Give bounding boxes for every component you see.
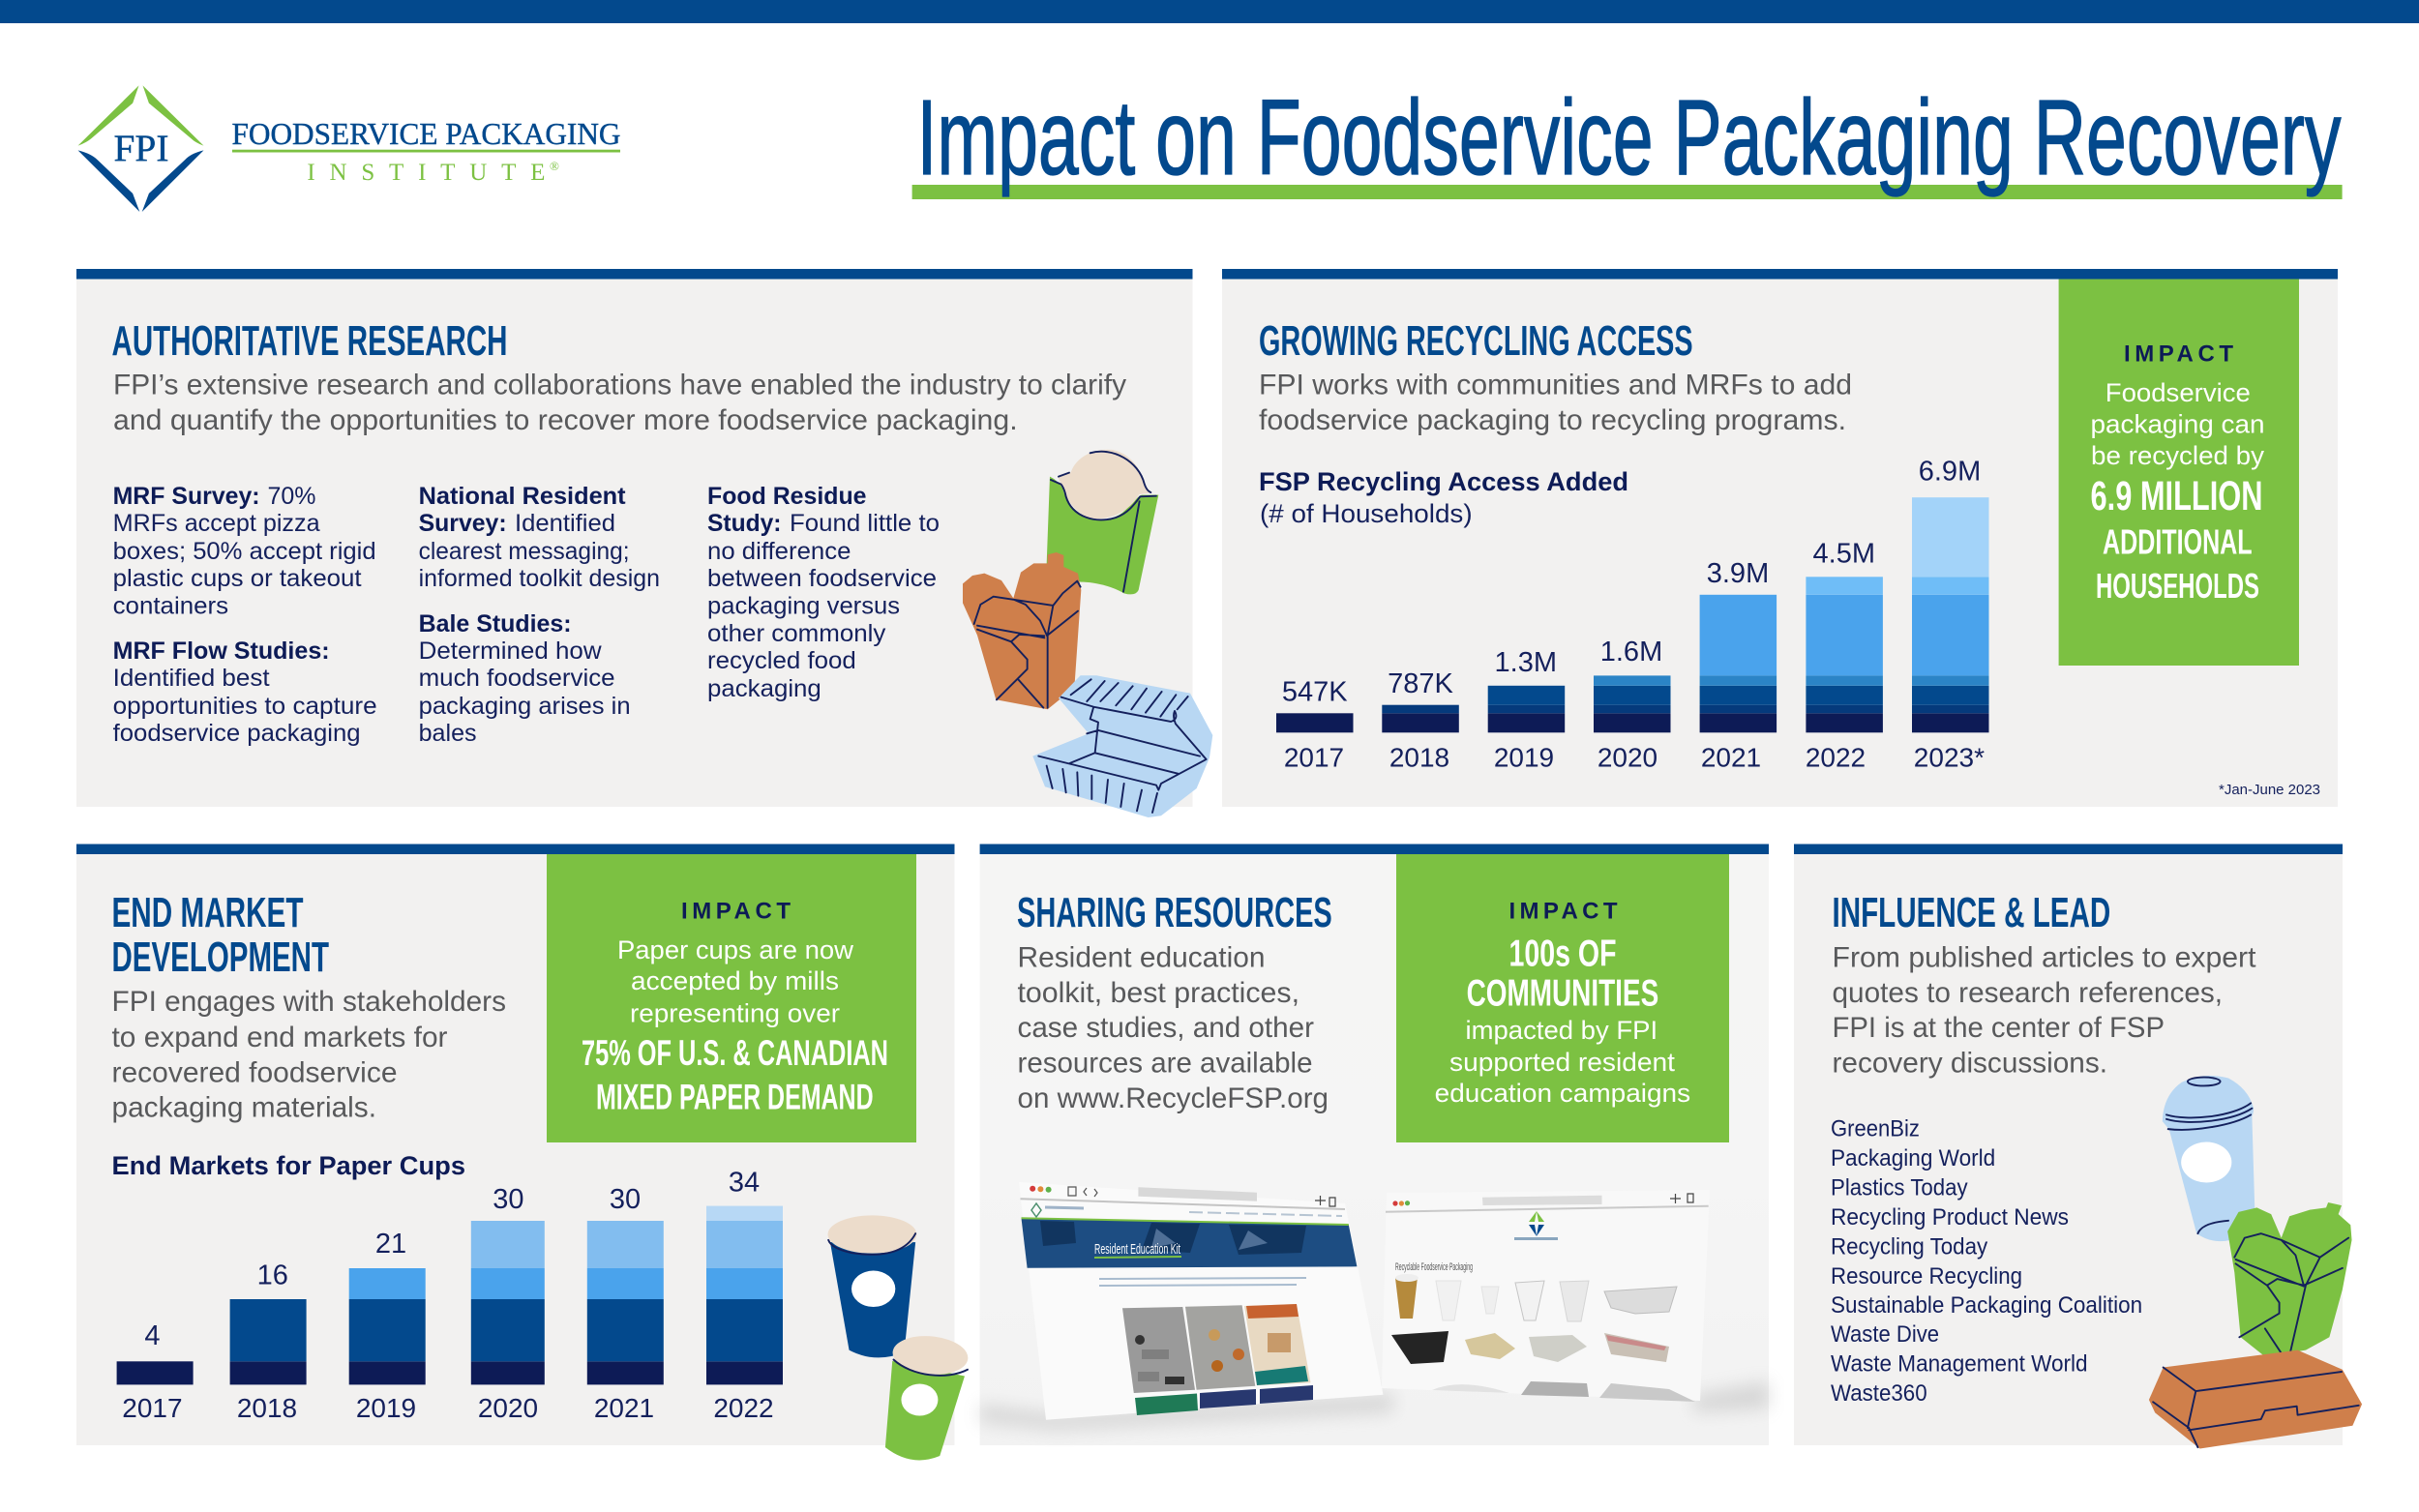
publication list: [1831, 1116, 2142, 1407]
column 1: foodservice packaging: [113, 720, 361, 747]
column 1: boxes; 50% accept rigid: [113, 538, 376, 565]
website mockup: recyclable foodservice packaging: Recyclable Foodservice Packaging: [1395, 1261, 1473, 1273]
chart title: End Markets for Paper Cups: [112, 1151, 465, 1180]
callout: impact communities: IMPACT: [1509, 898, 1618, 924]
callout: impact paper cups: Paper cups are now: [617, 935, 854, 964]
callout: impact households: ADDITIONAL: [2103, 522, 2253, 562]
column 1: opportunities to capture: [113, 693, 377, 720]
icon: packaging illustrations: [963, 450, 1212, 817]
bar chart: recycling access: 2021: [1701, 742, 1761, 772]
column 2: Identified: [515, 510, 615, 537]
callout: impact households: [2059, 279, 2299, 666]
bar chart: recycling access: 1.6M: [1600, 637, 1662, 667]
bar chart: recycling access: 6.9M: [1919, 456, 1981, 487]
bar chart: recycling access: 1.3M: [1495, 647, 1557, 678]
bar chart: end markets: 2017: [122, 1393, 183, 1423]
bar chart: recycling access: 2017: [1284, 742, 1344, 772]
icon: green cup: [885, 1332, 972, 1460]
heading: SHARING RESOURCES: [1017, 889, 1332, 936]
heading: AUTHORITATIVE RESEARCH: [112, 317, 507, 365]
bar chart: recycling access: [1276, 456, 1989, 772]
description: recovered foodservice: [112, 1056, 397, 1089]
callout: impact paper cups: MIXED PAPER DEMAND: [596, 1078, 874, 1117]
callout: impact paper cups: accepted by mills: [631, 966, 839, 995]
description: packaging materials.: [112, 1092, 376, 1124]
bar chart: end markets: 16: [257, 1260, 288, 1290]
callout: impact households: IMPACT: [2124, 341, 2233, 368]
callout: impact households: HOUSEHOLDS: [2096, 566, 2259, 606]
column 1: Identified best: [113, 665, 270, 692]
heading: END MARKET: [112, 889, 304, 936]
description: quotes to research references,: [1833, 977, 2223, 1009]
icon: paper cups: [828, 1215, 972, 1460]
column 2: Determined how: [419, 637, 603, 665]
column 3: other commonly: [707, 620, 886, 647]
icon: blue cup: [828, 1215, 916, 1357]
bar chart: end markets: 2022: [713, 1393, 774, 1423]
panel: influence and lead: [1794, 844, 2362, 1448]
chart title: [1259, 467, 1628, 528]
icon: orange takeout box: [963, 552, 1081, 709]
column 1: MRFs accept pizza: [113, 510, 320, 537]
column 1: plastic cups or takeout: [113, 565, 362, 592]
column 1: containers: [113, 592, 228, 619]
bar chart: recycling access: 2018: [1389, 742, 1449, 772]
bar chart: recycling access: 2020: [1598, 742, 1657, 772]
column 2: [419, 483, 660, 747]
column 3: Study:: [707, 510, 782, 537]
logo institute: INSTITUTE: [307, 160, 545, 186]
icon: blue clamshell: [1032, 675, 1212, 817]
description: [112, 986, 506, 1124]
column 3: recycled food: [707, 647, 856, 674]
callout: impact paper cups: representing over: [630, 998, 840, 1027]
bar chart: recycling access: 787K: [1388, 668, 1454, 699]
column 2: Bale Studies:: [419, 610, 572, 637]
bar chart: end markets: 30: [493, 1184, 524, 1215]
icon: packaging illustrations: [2149, 1076, 2362, 1448]
bar chart: end markets: 34: [729, 1167, 760, 1198]
logo mark letters: FPI: [114, 128, 168, 169]
heading: INFLUENCE & LEAD: [1833, 889, 2110, 936]
bar chart: recycling access: 3.9M: [1707, 558, 1769, 589]
bar chart: end markets: 21: [375, 1229, 406, 1260]
description: Resident education: [1018, 941, 1266, 973]
column 1: [113, 483, 377, 747]
callout: impact communities: education campaigns: [1435, 1079, 1690, 1108]
description: [1018, 941, 1329, 1114]
callout: impact communities: COMMUNITIES: [1467, 973, 1658, 1014]
logo name: FOODSERVICE PACKAGING: [232, 116, 621, 151]
description: FPI engages with stakeholders: [112, 986, 506, 1018]
column 2: informed toolkit design: [419, 565, 660, 592]
publication list: Packaging World: [1831, 1145, 1995, 1171]
website mockups: [980, 1182, 1769, 1430]
bar chart: recycling access: 2023*: [1914, 742, 1985, 772]
bar chart: recycling access: 4.5M: [1813, 538, 1875, 569]
heading: GROWING RECYCLING ACCESS: [1259, 317, 1693, 365]
bar chart: recycling access: 2022: [1806, 742, 1866, 772]
column 3: no difference: [707, 538, 851, 565]
callout: impact households: be recycled by: [2091, 441, 2265, 470]
publication list: Recycling Product News: [1831, 1204, 2069, 1230]
website mockup: recyclable foodservice packaging: [1382, 1190, 1710, 1402]
panel: growing recycling access: [1222, 269, 2338, 807]
publication list: Plastics Today: [1831, 1174, 1968, 1201]
publication list: Waste Management World: [1831, 1351, 2088, 1378]
icon: green takeout box: [2227, 1202, 2352, 1356]
callout: impact paper cups: IMPACT: [681, 898, 791, 924]
description: recovery discussions.: [1833, 1048, 2107, 1080]
callout: impact paper cups: 75% OF U.S. & CANADIAN: [582, 1033, 888, 1073]
website mockup: resident education kit: Resident Education Kit: [1094, 1241, 1180, 1258]
logo: [78, 85, 620, 212]
bar chart: recycling access: 547K: [1282, 676, 1348, 707]
description: foodservice packaging to recycling programs.: [1259, 404, 1846, 436]
heading: DEVELOPMENT: [112, 934, 329, 981]
bar chart: end markets: 2021: [594, 1393, 654, 1423]
publication list: Waste Dive: [1831, 1321, 1939, 1348]
column 1: 70%: [267, 483, 315, 510]
description: [1833, 941, 2256, 1080]
publication list: GreenBiz: [1831, 1116, 1920, 1142]
column 2: clearest messaging;: [419, 538, 630, 565]
description: [113, 370, 1126, 436]
icon: fries box: [1047, 450, 1158, 594]
footnote: *Jan-June 2023: [2219, 782, 2320, 798]
column 2: National Resident: [419, 483, 626, 510]
description: and quantify the opportunities to recover more foodservice packaging.: [113, 404, 1018, 436]
callout: impact paper cups: [547, 854, 916, 1142]
icon: plastic cup: [2163, 1076, 2255, 1241]
logo institute: ®: [550, 159, 559, 173]
bar chart: end markets: 2019: [356, 1393, 416, 1423]
publication list: Resource Recycling: [1831, 1263, 2022, 1290]
description: on www.RecycleFSP.org: [1018, 1082, 1329, 1114]
column 2: packaging arises in: [419, 693, 631, 720]
callout: impact communities: 100s OF: [1509, 933, 1616, 974]
callout: impact communities: [1396, 854, 1729, 1142]
panel: end market development: [76, 844, 972, 1460]
callout: impact households: 6.9 MILLION: [2090, 473, 2262, 519]
bar chart: end markets: 2018: [237, 1393, 297, 1423]
bar chart: end markets: 30: [610, 1184, 641, 1215]
description: FPI’s extensive research and collaborations have enabled the industry to clarify: [113, 370, 1126, 401]
icon: orange clamshell: [2149, 1350, 2362, 1448]
column 3: Found little to: [790, 510, 940, 537]
column 2: Survey:: [419, 510, 507, 537]
description: case studies, and other: [1018, 1012, 1314, 1044]
callout: impact households: packaging can: [2090, 410, 2264, 439]
bar chart: end markets: 2020: [478, 1393, 538, 1423]
column 3: Food Residue: [707, 483, 867, 510]
callout: impact communities: supported resident: [1449, 1048, 1676, 1077]
description: FPI is at the center of FSP: [1833, 1012, 2165, 1044]
bar chart: end markets: [117, 1167, 783, 1423]
panel: sharing resources: [980, 844, 1769, 1445]
description: [1259, 370, 1852, 436]
column 3: [707, 483, 940, 702]
column 2: bales: [419, 720, 477, 747]
publication list: Waste360: [1831, 1380, 1927, 1407]
chart title: FSP Recycling Access Added: [1259, 467, 1628, 496]
panel: authoritative research: [76, 269, 1212, 817]
top band: [0, 0, 2419, 23]
column 3: packaging versus: [707, 592, 900, 619]
callout: impact communities: impacted by FPI: [1465, 1016, 1657, 1045]
publication list: Recycling Today: [1831, 1234, 1987, 1260]
publication list: Sustainable Packaging Coalition: [1831, 1292, 2142, 1319]
website mockup: resident education kit: [1019, 1182, 1384, 1420]
description: resources are available: [1018, 1048, 1312, 1080]
description: to expand end markets for: [112, 1022, 448, 1053]
column 2: much foodservice: [419, 665, 615, 692]
bar chart: end markets: 4: [144, 1320, 160, 1351]
bar chart: recycling access: 2019: [1494, 742, 1554, 772]
heading: [112, 889, 329, 981]
chart title: (# of Households): [1260, 499, 1473, 528]
logo mark: diamond: [78, 85, 204, 212]
column 3: packaging: [707, 675, 821, 702]
callout: impact households: Foodservice: [2105, 378, 2251, 407]
description: From published articles to expert: [1833, 941, 2256, 973]
column 1: MRF Flow Studies:: [113, 637, 330, 665]
description: toolkit, best practices,: [1018, 977, 1299, 1009]
column 1: MRF Survey:: [113, 483, 260, 510]
description: FPI works with communities and MRFs to add: [1259, 370, 1852, 401]
column 3: between foodservice: [707, 565, 937, 592]
